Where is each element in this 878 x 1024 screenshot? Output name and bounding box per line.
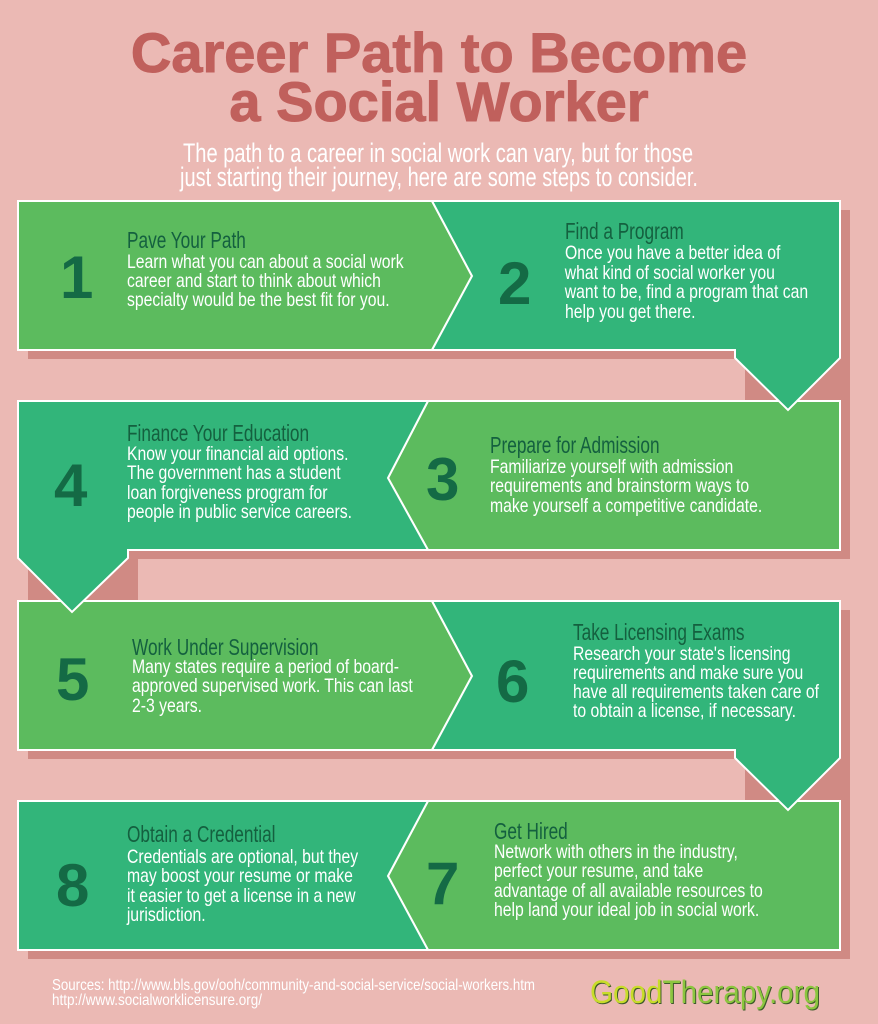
panel: step 1 — [18, 201, 472, 350]
panel: step 8: it easier to get a license in a new — [127, 885, 356, 906]
panel: step 1: Learn what you can about a social work — [127, 251, 404, 272]
panel: step 3: requirements and brainstorm ways to — [490, 475, 749, 496]
subtitle: just starting their journey, here are some steps to consider. — [179, 162, 698, 192]
panel: step 3: Familiarize yourself with admission — [490, 456, 733, 477]
shadows — [28, 210, 850, 959]
panel: step 2: want to be, find a program that can — [564, 281, 808, 302]
panel: step 8: may boost your resume or make — [127, 865, 353, 886]
panel: step 6: to obtain a license, if necessary. — [573, 700, 796, 721]
panel: step 6: have all requirements taken care of — [573, 681, 819, 702]
panel: step 5: Many states require a period of board- — [132, 656, 399, 677]
panel: step 2: Once you have a better idea of — [565, 242, 781, 263]
panel: step 8: jurisdiction. — [126, 904, 206, 925]
sources: http://www.socialworklicensure.org/ — [52, 992, 262, 1009]
panel: step 4: loan forgiveness program for — [127, 482, 328, 503]
panel: step 2 — [432, 201, 840, 410]
panel: step 5 — [18, 601, 472, 750]
panel: step 6 — [432, 601, 840, 810]
panel: step 3 — [388, 401, 840, 550]
panel: step 8 — [18, 801, 428, 950]
panel: step 7: perfect your resume, and take — [494, 860, 703, 881]
panel: step 8: 8 — [56, 852, 89, 919]
panel: step 1: specialty would be the best fit for you. — [127, 289, 390, 310]
panel: step 2: help you get there. — [565, 301, 695, 322]
panel: step 6: Research your state's licensing — [573, 643, 790, 664]
panel: step 7: 7 — [426, 850, 459, 917]
panel: step 5: 2-3 years. — [132, 695, 202, 716]
panel: step 1: Pave Your Path — [127, 229, 246, 254]
title: Career Path to Become — [131, 21, 747, 84]
title: a Social Worker — [229, 70, 649, 133]
panel: step 4: 4 — [54, 452, 88, 519]
subtitle: The path to a career in social work can vary, but for those — [183, 138, 693, 168]
panel: step 1: career and start to think about which — [127, 270, 381, 291]
panel: step 7: advantage of all available resources to — [494, 880, 763, 901]
panel: step 4 — [18, 401, 428, 612]
panel: step 4: Finance Your Education — [127, 422, 309, 447]
panel: step 8: Credentials are optional, but they — [127, 846, 358, 867]
panel: step 4: Know your financial aid options. — [127, 443, 349, 464]
panel: step 6: requirements and make sure you — [573, 662, 803, 683]
title — [131, 21, 747, 133]
sources: Sources: http://www.bls.gov/ooh/community-and-social-service/social-workers.htm — [52, 977, 535, 994]
panel: step 3: Prepare for Admission — [490, 434, 660, 459]
subtitle — [179, 138, 698, 192]
panel: step 7: help land your ideal job in social work. — [494, 899, 759, 920]
panel: step 3: 3 — [426, 446, 459, 513]
panel: step 7: Get Hired — [494, 820, 568, 845]
panel: step 3: make yourself a competitive candidate. — [490, 495, 762, 516]
panel: step 7: Network with others in the industry, — [494, 841, 738, 862]
panel: step 7 — [388, 801, 840, 950]
panel: step 5: approved supervised work. This can last — [132, 675, 413, 696]
panel: step 5: Work Under Supervision — [132, 636, 318, 661]
panel: step 4: people in public service careers. — [127, 501, 352, 522]
logo: GoodTherapy.org — [591, 975, 821, 1011]
panel: step 2: what kind of social worker you — [564, 262, 775, 283]
sources — [52, 977, 535, 1009]
panel: step 2: 2 — [498, 250, 531, 317]
panel: step 4: The government has a student — [127, 462, 341, 483]
panel: step 8: Obtain a Credential — [127, 823, 276, 848]
panel: step 5: 5 — [56, 646, 89, 713]
panel: step 6: 6 — [496, 648, 529, 715]
panel: step 6: Take Licensing Exams — [573, 621, 744, 646]
panel: step 1: 1 — [60, 244, 93, 311]
panel: step 2: Find a Program — [565, 220, 684, 245]
logo: GoodTherapy.org — [590, 974, 820, 1010]
